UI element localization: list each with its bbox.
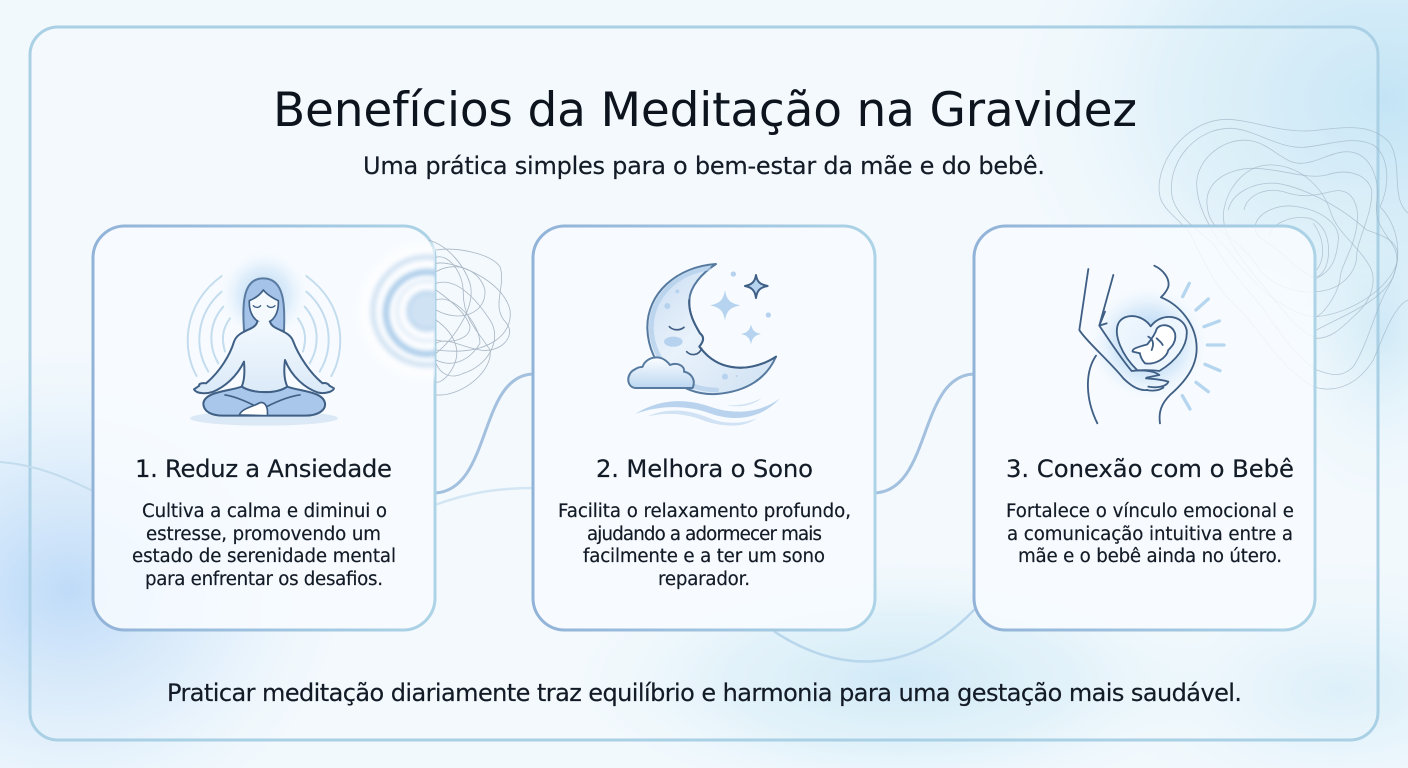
card 2 text: reparador. [658,569,750,590]
card 3 text: a comunicação intuitiva entre a [1007,524,1293,545]
card 1 heading: 1. Reduz a Ansiedade [135,454,392,483]
card 2 text: Facilita o relaxamento profundo, [558,501,851,522]
card 1 text: para enfrentar os desafios. [145,569,383,590]
title: Benefícios da Meditação na Gravidez [273,83,1137,138]
card 3 text [1006,501,1294,567]
decorative contour lines: right [1159,119,1408,389]
card 1 text [132,501,396,590]
card 1 text: Cultiva a calma e diminui o [142,501,387,522]
card 1 text: estado de serenidade mental [132,546,396,567]
icon: pregnant belly with baby in heart [1079,266,1224,423]
card 3 text: mãe e o bebê ainda no útero. [1018,546,1282,567]
icon: ripple circles [370,240,435,382]
card 3 text: Fortalece o vínculo emocional e [1006,501,1294,522]
card 1 text: estresse, promovendo um [146,524,381,545]
footer message: Praticar meditação diariamente traz equilíbrio e harmonia para uma gestação mais saudável. [167,679,1242,707]
icon: sleeping moon [628,264,780,426]
connectors between cards [0,374,974,662]
card 2 text: ajudando a adormecer mais [587,524,822,545]
card 2 heading: 2. Melhora o Sono [596,454,813,483]
icon: meditating woman [188,252,340,426]
card 2: Melhora o Sono [533,226,875,630]
decorative scribble lines [428,240,510,395]
subtitle: Uma prática simples para o bem-estar da mãe e do bebê. [363,152,1045,180]
card 1: Reduz a Ansiedade [93,226,510,630]
card 3 heading: 3. Conexão com o Bebê [1006,454,1294,483]
card 2 text [558,501,851,590]
card 2 text: facilmente e a ter um sono [583,546,825,567]
card 3: Conexão com o Bebê [974,226,1315,630]
